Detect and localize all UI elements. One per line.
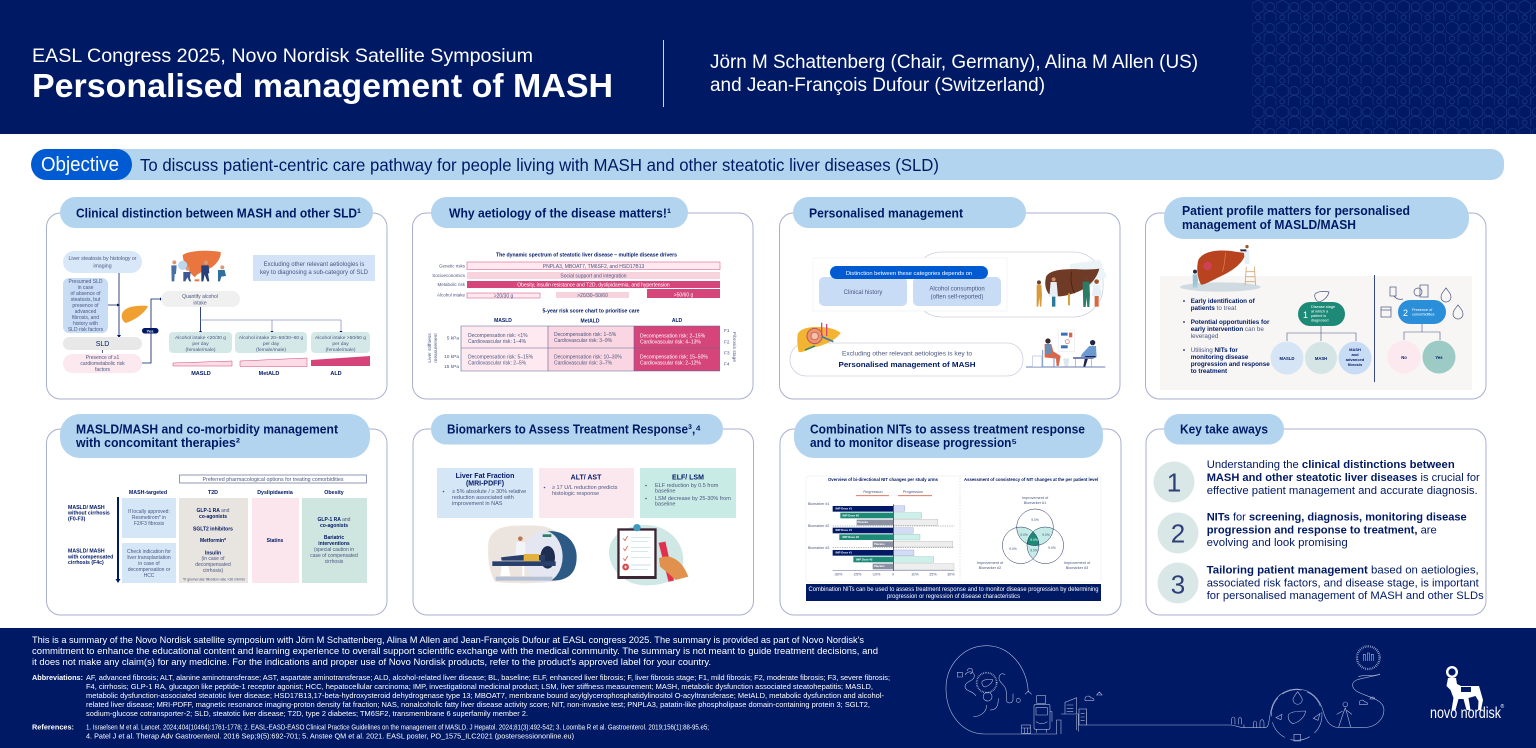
takeaway 1: MASH and other steatotic liver diseases is crucial for	[1207, 472, 1480, 484]
icon: clinicians with brown liver	[1037, 260, 1107, 307]
bullet list: patient profile: Utilising	[1191, 347, 1214, 354]
abbreviations: metabolic dysfunction-associated steatotic liver disease; HSD17B13,17-beta-hydroxysteroid dehydrogenase type 13; MBOAT7, membrane bound acylglycerophosphatidylinositol O-acyltransferase; MetALD, metabolic dysfunction and alcohol-	[86, 693, 885, 700]
table: pharmacological options: SGLT2 inhibitors	[193, 526, 233, 532]
alcohol intake boxes: per day	[263, 341, 280, 347]
heading: biomarkers: Biomarkers to Assess Treatment Response³,⁴	[447, 422, 701, 436]
chart: five-year risk score: F1	[724, 328, 730, 334]
diagram: disease stage	[1270, 291, 1372, 374]
abbreviations: related liver disease; MRI-PDFF, magnetic resonance imaging-proton density fat fraction; NAS, nonalcoholic fatty liver disease activity score; NIT, non-invasive test; PNPLA3, patatin-like phospholipase domain-containing protein 3; SGLT2,	[86, 702, 870, 709]
main title: Personalised management of MASH	[32, 67, 613, 104]
line art: patient journey	[946, 646, 1384, 741]
table: pharmacological options: HCC	[144, 573, 155, 579]
table: pharmacological options: F2/F3 fibrosis	[134, 521, 165, 527]
table: pharmacological options: (in case of	[201, 556, 225, 562]
bullet list: patient profile: progression and response	[1191, 361, 1270, 368]
card: ELF/LSM	[640, 468, 736, 518]
references	[32, 724, 709, 740]
table: pharmacological options: *If glomerular filtration rate >30 ml/min	[183, 578, 245, 582]
card: ELF/LSM: LSM decrease by 25-30% from	[655, 496, 731, 502]
symposium line: EASL Congress 2025, Novo Nordisk Satellite Symposium	[32, 45, 533, 67]
takeaway 2: 2	[1171, 519, 1185, 549]
authors	[710, 52, 1198, 96]
table: pharmacological options: cirrhosis	[325, 559, 344, 565]
callout: excluding aetiologies: key to diagnosing a sub-category of SLD	[260, 270, 369, 276]
card: liver fat fraction: reduction associated with	[452, 495, 514, 501]
logo: novo nordisk: ®	[1500, 703, 1504, 710]
illustration: MRI scanner	[488, 526, 577, 583]
divider in chart	[959, 478, 961, 580]
bar chart: bidirectional NIT changes: IMP Dose #2	[842, 535, 859, 539]
bullet list: patient profile: monitoring disease	[1191, 354, 1249, 361]
table: pharmacological options: (F0-F3)	[68, 516, 86, 522]
table: pharmacological options: GLP-1 RA and	[318, 517, 350, 523]
chart: five-year risk score: Cardiovascular risk: 4–13%	[640, 340, 701, 346]
bullet list: patient profile: can be	[1243, 326, 1264, 333]
chart: five-year risk score: Cardiovascular risk: 3–7%	[554, 360, 613, 366]
chart: disease drivers spectrum: Genetic risks	[439, 264, 466, 268]
authors: Jörn M Schattenberg (Chair, Germany), Alina M Allen (US)	[710, 52, 1198, 73]
bar chart: bidirectional NIT changes: Regression	[863, 490, 883, 494]
table: pharmacological options: co-agonists	[199, 514, 227, 520]
heading: clinical distinction: Clinical distinction between MASH and other SLD¹	[76, 206, 361, 220]
heading: comorbidity management: with concomitant therapies²	[75, 436, 240, 450]
chart: five-year risk score: measurement	[433, 333, 439, 363]
card: ALT/AST: ALT/ AST	[571, 474, 602, 482]
diagram: comorbidities: comorbidities	[1412, 312, 1434, 316]
heading: personalised management: Personalised management	[809, 206, 964, 220]
takeaway 3: for personalised management of MASH and other SLDs	[1207, 590, 1484, 602]
flow: quantify alcohol intake	[161, 291, 342, 334]
alcohol intake boxes: Alcohol intake <20/30 g	[175, 335, 226, 341]
takeaway 1: 1	[1167, 468, 1181, 498]
bar chart: bidirectional NIT changes: Placebo	[858, 520, 869, 524]
diagram: comorbidities: No	[1401, 355, 1407, 360]
logo: novo nordisk	[1430, 667, 1504, 722]
icon: doctor-patient consultation	[1026, 330, 1105, 367]
callout: excluding aetiologies	[253, 255, 375, 281]
alcohol intake boxes: per day	[192, 341, 209, 347]
heading: key take aways: Key take aways	[1180, 422, 1268, 436]
flow: diagnosis of SLD	[63, 251, 142, 373]
severity wedges: ALD	[330, 371, 342, 377]
heading: combination NITs: and to monitor disease progression⁵	[810, 436, 1017, 450]
table: pharmacological options: liver transplantation	[127, 555, 171, 561]
flow: diagnosis of SLD: imaging	[93, 264, 112, 270]
diagram: disease stage: MASLD	[1280, 356, 1294, 361]
table: pharmacological options: Statins	[267, 538, 284, 544]
bullet list: patient profile: leveraged	[1191, 333, 1219, 340]
alcohol intake boxes: (female/male)	[256, 347, 286, 353]
diagram: disease stage: Disease stage	[1311, 305, 1335, 309]
bullet list: patient profile: early intervention	[1191, 326, 1243, 333]
chart: five-year risk score: Decompensation risk: 5–15%	[468, 354, 534, 360]
distinction diagram: (often self-reported)	[931, 294, 983, 300]
abbreviations: AF, advanced fibrosis; ALT, alanine aminotransferase; AST, aspartate aminotransferase; ALD, alcohol-related liver disease; BL, baseline; ELF, enhanced liver fibrosis; F, liver fibrosis stage; F1, mild fibrosis; F2, moderate fibrosis; F3, severe fibrosis;	[86, 675, 890, 682]
chart: disease drivers spectrum: Alcohol intake	[437, 292, 465, 298]
flow: yes arrow	[142, 298, 163, 363]
bar chart: bidirectional NIT changes: -10%	[872, 572, 881, 576]
flow: diagnosis of SLD: SLD	[96, 341, 109, 348]
chart: five-year risk score: Cardiovascular risk: 2–12%	[640, 360, 701, 366]
bullet list: patient profile: NITs for	[1214, 347, 1238, 354]
table: pharmacological options: Obesity	[324, 490, 344, 496]
chart frame	[806, 476, 1101, 582]
bar chart: bidirectional NIT changes: 25%	[929, 572, 937, 576]
takeaway 3: associated risk factors, and disease stage, is important	[1207, 578, 1480, 590]
table: pharmacological options: MASLD/ MASH	[68, 549, 105, 555]
flow: diagnosis of SLD: fibrosis, and	[72, 315, 99, 321]
flow: diagnosis of SLD: presence of	[72, 303, 99, 309]
venn diagram: consistency of NIT changes: 9.0%	[1048, 546, 1056, 550]
card: liver fat fraction	[437, 468, 533, 518]
disclaimer text: it does not make any claim(s) for any medicine. For the indications and proper use of Novo Nordisk products, refer to the product's approved label for your country.	[32, 657, 711, 667]
flow: diagnosis of SLD: advanced	[75, 309, 97, 315]
venn diagram: consistency of NIT changes: 9.0%	[1030, 548, 1038, 552]
bar chart: bidirectional NIT changes: Placebo	[874, 564, 885, 568]
chart: five-year risk score: 5 kPa	[447, 336, 459, 342]
takeaway 1: effective patient management and accurate diagnosis.	[1207, 485, 1478, 497]
venn diagram: consistency of NIT changes: Improvement of	[1064, 561, 1091, 565]
diagram: comorbidities: 2	[1403, 308, 1408, 318]
chart: disease drivers spectrum: Social support and integration	[560, 274, 627, 280]
bar chart: bidirectional NIT changes: Biomarker #3	[808, 546, 829, 550]
panel: combination NITs	[780, 414, 1121, 615]
conclusion strip: Combination NITs can be used to assess treatment response and to monitor disease progression by determining	[808, 586, 1099, 593]
takeaway 1	[1154, 459, 1480, 502]
diagram: disease stage: and	[1351, 352, 1359, 357]
heading: patient profile: management of MASLD/MASH	[1182, 218, 1356, 232]
table: pharmacological options: without cirrhosis	[67, 511, 110, 517]
table: pharmacological options: in case of	[138, 561, 160, 567]
flow: diagnosis of SLD: Presence of ≥1	[86, 355, 120, 361]
bar chart: bidirectional NIT changes: -25%	[853, 572, 862, 576]
diagram: disease stage: patient is	[1311, 314, 1326, 318]
alcohol intake boxes: per day	[332, 341, 349, 347]
diagram: disease stage: at which a	[1311, 310, 1329, 314]
bar chart: bidirectional NIT changes: Overview of bi-directional NIT changes per study arms	[828, 477, 939, 482]
divider between diagrams	[1374, 275, 1375, 382]
references: References:	[32, 724, 74, 732]
chart: five-year risk score	[427, 309, 737, 371]
icon: liver with figures	[1180, 245, 1261, 292]
venn diagram: consistency of NIT changes: 9.0%	[1030, 538, 1038, 542]
table: pharmacological options: co-agonists	[320, 523, 348, 529]
heading: combination NITs: Combination NITs to assess treatment response	[810, 422, 1085, 436]
icon: clinicians around a liver	[171, 251, 226, 281]
bar chart: bidirectional NIT changes: IMP Dose #2	[842, 514, 859, 518]
distinction diagram	[813, 258, 1007, 311]
distinction diagram: Distinction between these categories depends on	[846, 271, 972, 277]
chart: five-year risk score: 10 kPa	[444, 354, 459, 360]
chart: five-year risk score: 15 kPa	[444, 364, 459, 370]
table: pharmacological options: with compensated	[67, 554, 113, 560]
table: pharmacological options: Insulin	[205, 550, 221, 556]
alcohol intake boxes: Alcohol intake >50/60 g	[315, 335, 366, 341]
card: ALT/AST: ≥ 17 U/L reduction predicts	[552, 485, 618, 491]
takeaway 2: NITs for screening, diagnosis, monitoring disease	[1207, 512, 1467, 524]
venn diagram: consistency of NIT changes: Biomarker #1	[1024, 501, 1046, 505]
severity wedges	[173, 356, 370, 377]
outline behind distinction diagram	[912, 252, 1103, 317]
chart: disease drivers spectrum: Socioeconomics	[432, 273, 466, 278]
table: pharmacological options: GLP-1 RA and	[197, 508, 229, 514]
references: 4. Patel J et al. Therap Adv Gastroenterol. 2016 Sep;9(5):692-701; 5. Anstee QM et al. 2021. EASL poster, PO_1575_ILC2021 (postersessiononline.eu)	[86, 734, 574, 740]
flow: diagnosis of SLD: history with	[73, 321, 98, 327]
bar chart: bidirectional NIT changes: 10%	[911, 572, 919, 576]
bar chart: bidirectional NIT changes: -30%	[834, 572, 843, 576]
heading: patient profile: Patient profile matters for personalised	[1182, 204, 1410, 218]
bullet list: patient profile: to treat	[1215, 305, 1236, 312]
chart: five-year risk score: Decompensation risk: 2–15%	[640, 334, 706, 340]
card: liver fat fraction: ≥ 5% absolute / ≥ 30% relative	[452, 489, 526, 495]
objective bar: Objective	[41, 154, 119, 176]
chart: five-year risk score: Decompensation risk: 1–5%	[554, 332, 617, 338]
bar chart: bidirectional NIT changes: IMP Dose #2	[856, 558, 873, 562]
chart: five-year risk score: ALD	[672, 318, 683, 324]
chart: five-year risk score: MASLD	[494, 318, 512, 324]
card: ELF/LSM: ELF reduction by 0.5 from	[655, 483, 719, 489]
venn diagram: consistency of NIT changes: Improvement of	[977, 561, 1004, 565]
bullet list: patient profile	[1183, 298, 1270, 375]
chart: five-year risk score: Fibrosis stage	[731, 332, 737, 362]
flow: quantify alcohol intake: Quantify alcohol	[182, 294, 218, 300]
bullet list: patient profile: Potential opportunities for	[1191, 319, 1270, 326]
card: ALT/AST	[539, 468, 634, 518]
table: pharmacological options: If locally approved:	[128, 509, 170, 515]
conclusion strip: progression or regression of disease characteristics	[887, 593, 1020, 600]
chart: five-year risk score: F4	[724, 362, 730, 368]
flow: diagnosis of SLD: factors	[95, 367, 110, 373]
diagram: disease stage: advanced	[1346, 357, 1365, 362]
bar chart: bidirectional NIT changes: 30%	[947, 572, 955, 576]
panel: personalised management	[780, 197, 1120, 399]
table: pharmacological options: case of compensated	[310, 553, 358, 559]
alcohol intake boxes: (female/male)	[186, 347, 216, 353]
bar chart: bidirectional NIT changes: IMP Dose #1	[836, 506, 852, 510]
distinction diagram: Alcohol consumption	[929, 286, 985, 292]
bar chart: bidirectional NIT changes: Placebo	[874, 542, 885, 546]
alcohol intake boxes	[169, 332, 370, 353]
chart: five-year risk score: Cardiovascular risk: 1–4%	[468, 339, 527, 345]
card: ALT/AST: histologic response	[552, 491, 599, 497]
abbreviations: sodium-glucose cotransporter-2; SLD, steatotic liver disease; T2D, type 2 diabetes; TM6SF2, transmembrane 6 superfamily member 2.	[86, 711, 528, 718]
takeaway 1: Understanding the clinical distinctions between	[1207, 459, 1455, 471]
flow: diagnosis of SLD: Presumed SLD	[69, 279, 103, 285]
venn diagram: consistency of NIT changes: Biomarker #2	[979, 566, 1001, 570]
panel: why aetiology matters	[412, 197, 753, 399]
diagram: comorbidities	[1381, 285, 1463, 374]
card: liver fat fraction: (MRI-PDFF)	[466, 480, 504, 488]
panel: key take aways	[1146, 414, 1486, 615]
bullet list: patient profile: patients	[1191, 305, 1215, 312]
table: pharmacological options: Metformin*	[200, 538, 226, 544]
chart: disease drivers spectrum: >50/60 g	[674, 292, 694, 298]
venn diagram: consistency of NIT changes: Assessment of consistency of NIT changes at the per patient level	[964, 477, 1098, 482]
card: ELF/LSM: baseline	[655, 488, 676, 494]
bar chart: bidirectional NIT changes: Biomarker #1	[808, 502, 829, 506]
diagram: disease stage: 1	[1303, 310, 1308, 320]
card: ELF/LSM: ELF/ LSM	[672, 474, 704, 482]
takeaway 3: Tailoring patient management based on aetiologies,	[1207, 564, 1479, 576]
bar chart: bidirectional NIT changes: Biomarker #2	[808, 524, 829, 528]
flow: diagnosis of SLD: Liver steatosis by histology or	[68, 256, 137, 262]
header banner	[0, 0, 1536, 134]
disclaimer text: commitment to enhance the educational content and learning experience to overall support scientific exchange with the medical community. The summary is not meant to guide treatment decisions, and	[32, 646, 878, 656]
chart: five-year risk score: MetALD	[581, 318, 600, 324]
diagram: comorbidities: Presence of	[1412, 308, 1433, 312]
table: pharmacological options: T2D	[208, 490, 218, 496]
bar chart: bidirectional NIT changes: 0	[892, 572, 894, 576]
panel: comorbidity management	[46, 414, 387, 615]
logo: novo nordisk: novo nordisk	[1430, 705, 1501, 722]
table: pharmacological options: Bariatric	[324, 535, 344, 541]
panel: clinical distinction	[46, 197, 387, 399]
diagram: disease stage: MASH	[1315, 356, 1327, 361]
authors: and Jean-François Dufour (Switzerland)	[710, 75, 1045, 96]
flow: diagnosis of SLD: steatosis, but	[71, 297, 101, 303]
chart: five-year risk score: Decompensation risk: <1%	[468, 333, 528, 339]
icon: liver cross-section	[797, 323, 841, 352]
chart: disease drivers spectrum: The dynamic spectrum of steatotic liver disease – multiple disease drivers	[496, 253, 677, 259]
table: pharmacological options: Resmetirom* in	[132, 515, 166, 521]
distinction diagram: Clinical history	[844, 290, 882, 296]
chart: disease drivers spectrum: Obesity, insulin resistance and T2D, dyslipidaemia, and hypertension	[517, 282, 670, 288]
bullet list: patient profile: Early identification of	[1191, 298, 1256, 305]
diagram: disease stage: fibrosis	[1348, 362, 1363, 367]
illustration: clipboard and blood tube	[609, 524, 688, 585]
panel: biomarkers	[413, 414, 754, 615]
bar chart: bidirectional NIT changes	[808, 477, 955, 576]
flow: yes arrow: Yes	[147, 328, 154, 334]
table: pharmacological options	[67, 475, 367, 583]
chart: disease drivers spectrum: >20/30–50/60	[577, 293, 608, 299]
callout: personalised management of MASH: Personalised management of MASH	[838, 360, 976, 369]
takeaway 2	[1158, 512, 1467, 554]
abbreviations: F4, cirrhosis; GLP-1 RA, glucagon like peptide-1 receptor agonist; HCC, hepatocellular carcinoma; IMP, investigational medicinal product; LSM, liver stiffness measurement; MASH, metabolic dysfunction associated steatohepatitis; MASLD,	[86, 684, 873, 691]
chart: five-year risk score: Decompensation risk: 15–50%	[640, 354, 708, 360]
chart: five-year risk score: Liver stiffness	[427, 333, 433, 363]
references: 1. Israelsen M et al. Lancet. 2024;404(10464):1761-1778; 2. EASL-EASD-EASO Clinical Practice Guidelines on the management of MASLD. J Hepatol. 2024;81(3):492-542; 3. Loomba R et al. Gastroenterol. 2019;156(1):88-95.e5;	[86, 724, 709, 732]
disclaimer text	[32, 635, 878, 667]
heading: why aetiology: Why aetiology of the disease matters!¹	[449, 206, 671, 220]
bar chart: bidirectional NIT changes: Progression	[903, 490, 923, 494]
flow: diagnosis of SLD: SLD risk factors	[68, 327, 104, 333]
card: ELF/LSM: baseline	[655, 502, 676, 508]
diagram: disease stage: MASH	[1349, 347, 1361, 352]
venn diagram: consistency of NIT changes	[964, 477, 1098, 570]
chart: five-year risk score: 5-year risk score chart to prioritise care	[542, 309, 640, 315]
panel: patient profile	[1146, 197, 1486, 399]
venn diagram: consistency of NIT changes: 9.0%	[1009, 547, 1017, 551]
diagram: comorbidities: Yes	[1435, 355, 1443, 360]
background of profile content	[1160, 276, 1472, 390]
flow: quantify alcohol intake: intake	[193, 300, 207, 306]
table: pharmacological options: MASLD/ MASH	[68, 505, 105, 511]
flow: diagnosis of SLD: in case	[78, 285, 94, 291]
chart: disease drivers spectrum: >20/30 g	[494, 294, 514, 300]
alcohol intake boxes: Alcohol intake 20–50/30–60 g	[239, 335, 303, 341]
table: pharmacological options: decompensated	[195, 562, 231, 568]
takeaway 2: evolving and look promising	[1207, 537, 1348, 549]
table: pharmacological options: cirrhosis (F4c)	[68, 560, 104, 566]
table: pharmacological options: interventions	[318, 541, 350, 547]
table: pharmacological options: decompensation or	[128, 567, 171, 573]
abbreviations: Abbreviations:	[32, 675, 83, 682]
table: pharmacological options: Dyslipidaemia	[257, 490, 293, 496]
table: pharmacological options: MASH-targeted	[129, 490, 167, 496]
takeaway 3	[1158, 562, 1484, 604]
heading: comorbidity management: MASLD/MASH and co-morbidity management	[76, 422, 339, 436]
objective bar	[31, 149, 1504, 180]
table: pharmacological options: (special caution in	[314, 547, 354, 553]
diagram: disease stage: diagnosed	[1311, 318, 1329, 322]
bullet list: patient profile: to treatment	[1191, 368, 1228, 375]
venn diagram: consistency of NIT changes: 9.0%	[1020, 533, 1028, 537]
venn diagram: consistency of NIT changes: 9.0%	[1031, 518, 1039, 522]
table: pharmacological options: cirrhosis)	[203, 568, 223, 574]
icon: liver	[122, 306, 148, 323]
chart: five-year risk score: Decompensation risk: 10–30%	[554, 354, 622, 360]
chart: disease drivers spectrum: PNPLA3, MBOAT7, TM6SF2, and HSD17B13	[543, 264, 644, 270]
callout: excluding aetiologies: Excluding other relevant aetiologies is	[264, 262, 364, 268]
venn diagram: consistency of NIT changes: Improvement of	[1022, 496, 1049, 500]
alcohol intake boxes: (female/male)	[326, 347, 356, 353]
severity wedges: MetALD	[259, 371, 279, 377]
takeaway 2: progression and response to treatment, are	[1207, 524, 1437, 536]
footer	[0, 628, 1536, 748]
flow: diagnosis of SLD: cardiometabolic risk	[80, 361, 125, 367]
chart: five-year risk score: Cardiovascular risk: 3–9%	[554, 338, 613, 344]
chart: disease drivers spectrum: Metabolic risk	[437, 282, 466, 287]
card: liver fat fraction: Liver Fat Fraction	[456, 473, 514, 480]
venn diagram: consistency of NIT changes: 9.0%	[1042, 533, 1050, 537]
callout: personalised management of MASH	[790, 343, 1023, 376]
disclaimer text: This is a summary of the Novo Nordisk satellite symposium with Jörn M Schattenberg, Alina M Allen and Jean-François Dufour at EASL congress 2025. The summary is provided as part of Novo Nordisk's	[32, 635, 864, 645]
conclusion strip	[806, 584, 1101, 601]
chart: five-year risk score: F2	[724, 340, 730, 346]
bar chart: bidirectional NIT changes: IMP Dose #1	[836, 528, 852, 532]
flow: diagnosis of SLD: of absence of	[70, 291, 101, 297]
objective bar: To discuss patient-centric care pathway for people living with MASH and other steatotic liver diseases (SLD)	[140, 155, 939, 175]
abbreviations	[32, 675, 890, 718]
table: pharmacological options: Preferred pharmacological options for treating comorbidities	[202, 477, 344, 483]
table: pharmacological options: Check indication for	[127, 549, 171, 555]
bar chart: bidirectional NIT changes: IMP Dose #1	[836, 550, 852, 554]
severity wedges: MASLD	[191, 371, 211, 377]
venn diagram: consistency of NIT changes: Biomarker #3	[1066, 566, 1088, 570]
card: liver fat fraction: improvement in NAS	[452, 501, 503, 507]
takeaway 3: 3	[1171, 569, 1185, 599]
chart: five-year risk score: F3	[724, 350, 730, 356]
callout: personalised management of MASH: Excluding other relevant aetiologies is key to	[842, 352, 973, 358]
chart: disease drivers spectrum	[432, 253, 720, 300]
chart: five-year risk score: Cardiovascular risk: 2–5%	[468, 360, 527, 366]
